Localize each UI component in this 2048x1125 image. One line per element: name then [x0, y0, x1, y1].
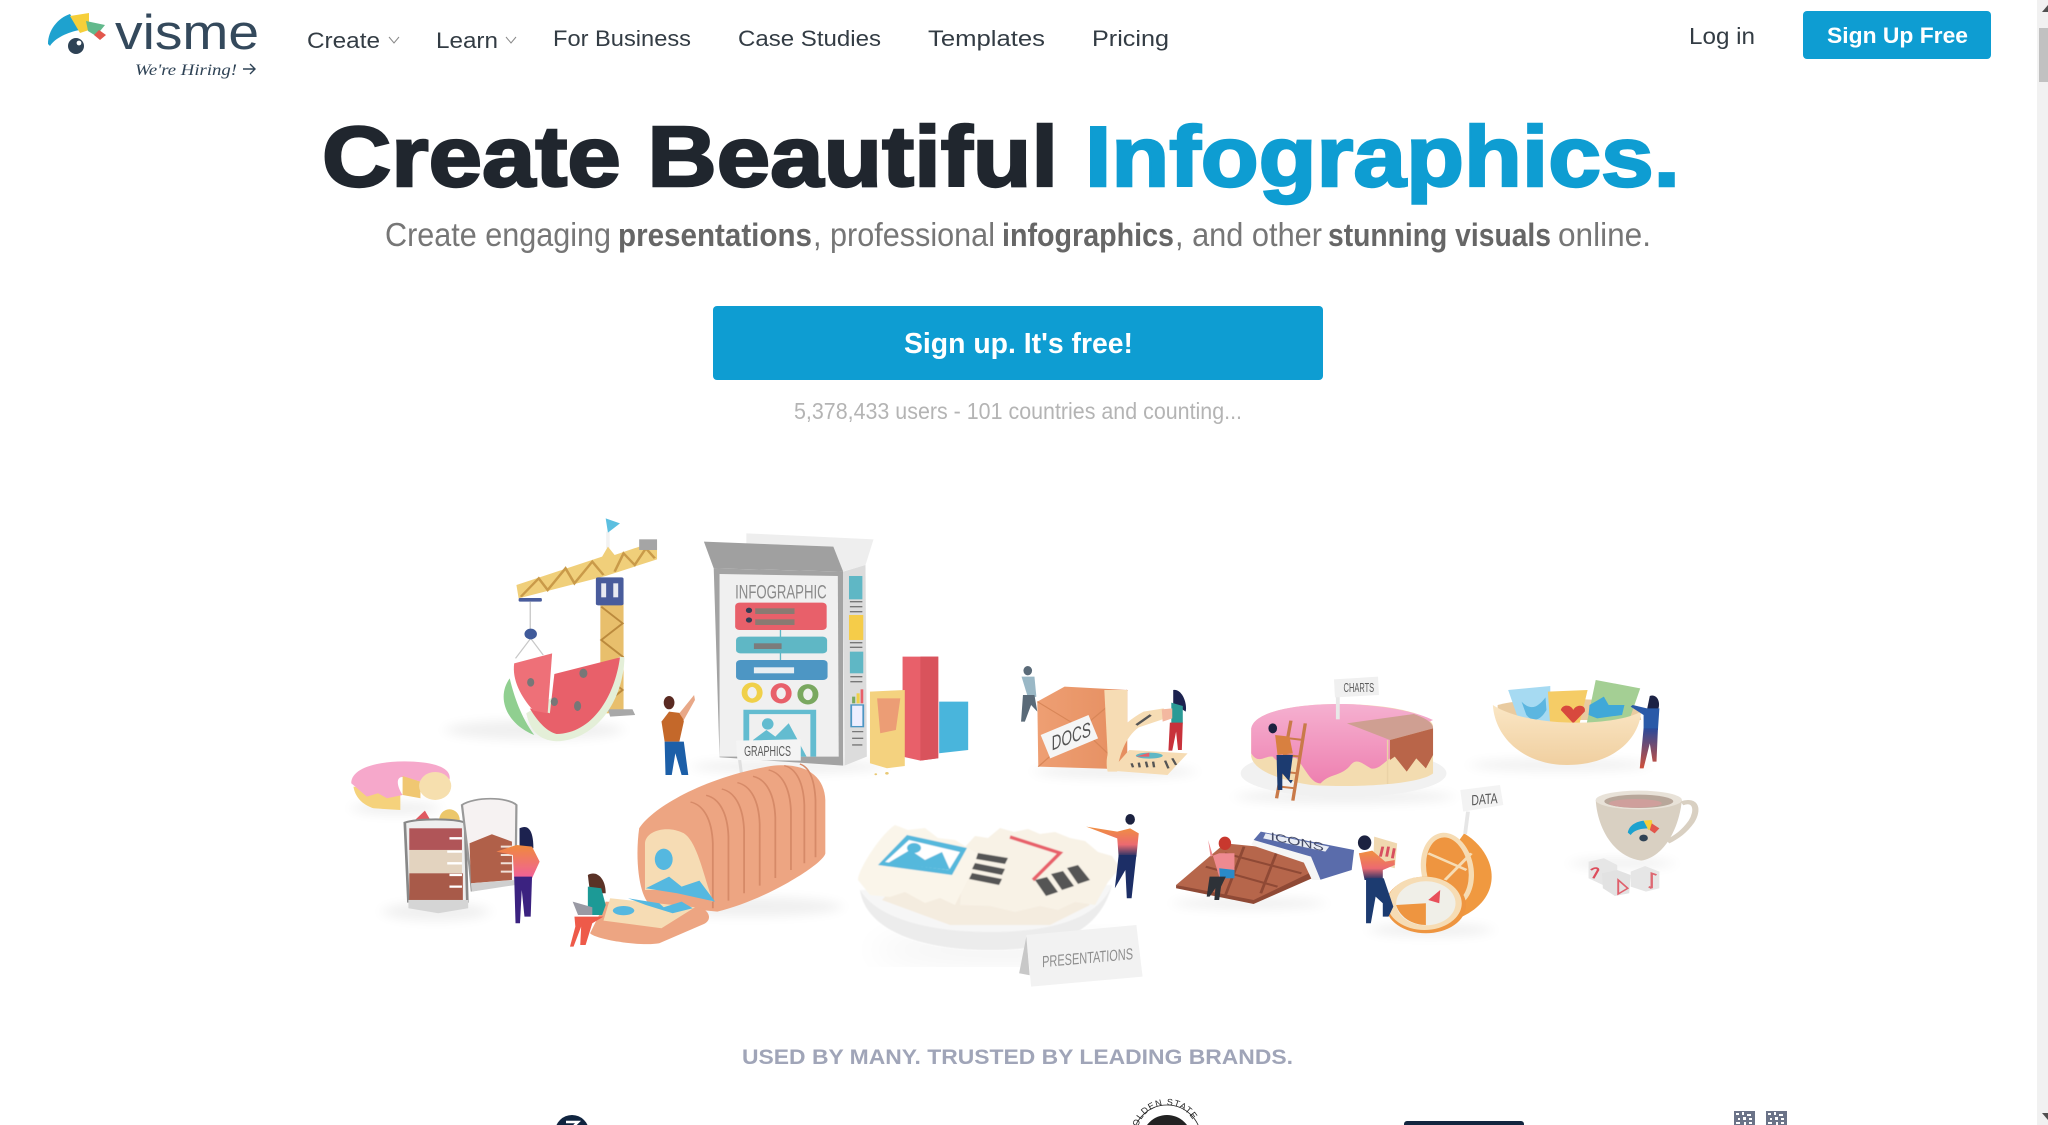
cake — [1251, 704, 1433, 786]
orange dome — [1417, 831, 1492, 920]
plate — [860, 885, 1130, 960]
cake plate — [1241, 749, 1446, 797]
subtitle: , and other — [1175, 216, 1322, 253]
flag: data — [1460, 785, 1503, 834]
button: Sign Up Free — [1803, 11, 1991, 59]
cookies — [858, 825, 1120, 925]
chocolate wrapper — [1251, 830, 1354, 880]
nav: Pricing: Pricing — [1092, 26, 1169, 51]
flag: charts — [1334, 677, 1379, 719]
button: Sign up. It's free! — [713, 306, 1323, 380]
brand logos row — [556, 1098, 1787, 1125]
icon: chevron — [389, 37, 399, 43]
nav: Case Studies: Case Studies — [738, 26, 881, 51]
logo: visme: visme — [115, 6, 259, 60]
paper sheets — [1107, 708, 1188, 775]
user count: 5,378,433 users - 101 countries and counting... — [794, 398, 1242, 424]
woman at docs — [1162, 690, 1186, 751]
person on ladder — [1268, 721, 1305, 801]
nav: For Business: For Business — [553, 26, 691, 51]
plate with cookies — [858, 825, 1130, 960]
person pointing up — [661, 695, 695, 775]
person on chocolate — [1207, 837, 1234, 900]
flag: data: DATA — [1471, 790, 1498, 809]
heading: used by many: USED BY MANY. TRUSTED BY LEADING BRANDS. — [742, 1046, 1293, 1069]
presentations card — [1019, 925, 1143, 987]
nav: Templates: Templates — [928, 26, 1045, 51]
coffee cup — [1596, 791, 1695, 861]
infographic box: INFOGRAPHIC — [735, 581, 827, 603]
bar chart blocks — [870, 657, 968, 775]
logo: visme: We're Hiring! — [135, 62, 237, 79]
docs box: DOCS — [1052, 718, 1091, 756]
navigation bar — [48, 6, 1991, 79]
nav: Create: Create — [307, 28, 380, 53]
logo: dark bar — [1404, 1121, 1524, 1125]
logo: visme — [48, 6, 259, 79]
subtitle: infographics — [1002, 217, 1174, 253]
illustration right half — [1019, 666, 1695, 987]
icon: chevron — [506, 37, 516, 43]
dice cubes — [1589, 858, 1659, 896]
subtitle: presentations — [618, 217, 812, 253]
left glass — [405, 809, 468, 913]
crane — [516, 518, 657, 717]
watermelon — [504, 653, 624, 741]
scrollbar — [2037, 0, 2048, 1125]
person with book — [1358, 835, 1397, 923]
button: Sign Up Free: Sign Up Free — [1827, 23, 1968, 48]
subtitle — [385, 216, 1651, 253]
faded walking person — [1021, 666, 1037, 722]
nav: Learn: Learn — [436, 28, 498, 53]
logo: round badge — [555, 1115, 589, 1125]
title: Infographics. — [1085, 110, 1680, 205]
woman at bowl — [1631, 695, 1659, 768]
shadows — [1033, 759, 1675, 937]
subtitle: , professional — [813, 216, 995, 253]
docs box — [1037, 687, 1127, 769]
subtitle: online. — [1558, 216, 1651, 253]
button: Sign up. It's free!: Sign up. It's free! — [904, 328, 1133, 360]
bowl with social cards — [1493, 680, 1641, 765]
infographic box — [704, 533, 874, 766]
pointing person — [1086, 814, 1139, 898]
subtitle: stunning visuals — [1328, 217, 1551, 253]
subtitle: Create engaging — [385, 216, 611, 253]
donut — [351, 761, 451, 810]
woman on bread — [570, 874, 606, 947]
chocolate bar — [1176, 843, 1316, 904]
woman at glass — [496, 827, 540, 923]
bread loaf — [637, 764, 825, 912]
bread slice — [590, 898, 709, 944]
title: Create Beautiful — [322, 110, 1058, 205]
compass disc — [1386, 877, 1466, 933]
chocolate wrapper: ICONS — [1270, 830, 1324, 854]
shadows — [351, 720, 887, 921]
title — [322, 110, 1680, 205]
right glass — [462, 799, 516, 892]
flag: graphics — [736, 739, 801, 780]
presentations card: PRESENTATIONS — [1042, 945, 1133, 971]
logo: QR codes — [1734, 1111, 1787, 1125]
nav: Log in: Log in — [1689, 23, 1755, 49]
illustration left half — [351, 518, 968, 947]
flag: graphics: GRAPHICS — [744, 742, 791, 759]
illustration right half: CHARTS — [1344, 681, 1374, 695]
